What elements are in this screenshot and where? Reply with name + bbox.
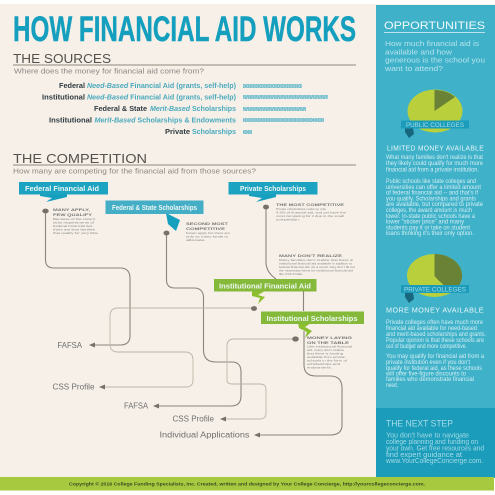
limited money body text: universities can offer a limited amount [386,184,481,191]
note: money laying on the table: that there is funding [307,352,344,356]
banner: public colleges: PUBLIC COLLEGES [406,122,465,129]
pie chart: private colleges [401,254,469,303]
note: the most competitive [276,202,347,222]
note: the most competitive: Private scholarships make up only [276,207,327,211]
footer bar: Copyright © 2016 College Funding Specialists, Inc. Created, written and designed by Your College Concierge, http://yourcollegeconcierge.com. [69,480,425,488]
more money body text: Private colleges often have much more [386,319,483,326]
note: the most competitive: most competing for it due to the small [276,214,345,218]
source row: federal need-based [59,81,302,90]
source row: institutional merit-based: Merit-Based Scholarships & Endowments [94,116,236,124]
node dots [42,205,299,342]
source row: federal and state merit-based: Federal & State [94,104,147,113]
note: money laying on the table: MONEY LAYING [307,335,352,340]
more money body text: families who demonstrate financial [386,376,474,383]
title: HOW FINANCIAL AID WORKS [13,10,356,49]
box: federal and state scholarships [106,200,204,231]
note: many don't realize: the necessary forms for institutional financial aid [279,268,354,272]
note: many don't realize: federal financial aid. As a result, they don't fill out [279,265,355,269]
question text: generous is the school you [385,56,485,65]
more money body text: out of budget and more competitive. [386,343,467,350]
box: federal financial aid: Federal Financial Aid [25,184,99,193]
note: many apply, few qualify: there are less families [53,228,96,232]
label: fafsa (federal): FAFSA [58,341,83,350]
panel: opportunities sidebar [376,5,495,409]
source row: federal and state merit-based [94,104,306,113]
limited money body text: Public schools like state colleges and [386,178,476,185]
panel: the next step [376,408,495,478]
source row: institutional need-based [42,92,328,102]
banner: private colleges: PRIVATE COLLEGES [404,286,467,294]
source row: institutional merit-based [49,116,324,124]
more money body text: You may qualify for financial aid from a [386,353,484,360]
box: institutional financial aid [214,279,316,304]
note: many apply, few qualify: MANY APPLY, [53,207,90,212]
note: many apply, few qualify: Federal Financial Aid, [53,224,93,228]
note: second most competitive: only so many funds to [186,234,229,238]
note: many apply, few qualify: Because of the recent [53,217,95,221]
box: institutional scholarships: Institutional Scholarships [266,314,358,323]
heading: more money available: MORE MONEY AVAILABLE [386,306,484,314]
source row: institutional need-based: Need-Based Financial Aid (grants, self-help) [87,92,237,102]
note: money laying on the table [307,335,353,370]
more money body text: need. [386,382,398,389]
next step body text [385,430,484,465]
label: fafsa (state): FAFSA [124,402,149,410]
note: many don't realize [279,253,355,276]
box: institutional scholarships [261,312,364,338]
more money body text: qualify for federal aid, as these schools [386,365,482,372]
next step body text: college planning and funding on [386,437,478,446]
more money body text [385,319,486,389]
note: second most competitive [186,221,231,242]
note: money laying on the table: scholarships and [307,362,341,366]
note: many apply, few qualify: that qualify for very little. [53,231,99,235]
note: money laying on the table: available from private [307,355,346,359]
box: private scholarships: Private Scholarships [240,184,306,193]
note: money laying on the table: endowments. [307,366,332,370]
note: money laying on the table: schools in the form of [307,358,347,362]
note: money laying on the table: aid, many don't realize [307,348,345,352]
more money body text: private institution even if you don't [386,359,470,366]
limited money body text: loans thinking it's their only option. [386,230,474,237]
source row: federal and state merit-based: Merit-Based Scholarships [150,104,236,113]
note: many don't realize: like CSS Profile. [279,272,303,276]
note: many apply, few qualify [53,207,99,235]
source row: federal need-based: Need-Based Financial Aid (grants, self-help) [87,81,237,90]
sources subtitle: Where does the money for financial aid come from? [14,68,204,76]
box: federal financial aid [19,182,108,202]
note: money laying on the table: ON THE TABLE [307,340,349,345]
flow lines [46,207,342,435]
note: second most competitive: Fewer apply but there are [186,231,231,235]
arrows [89,342,260,438]
next step body text: www.YourCollegeConcierge.com. [385,456,483,465]
limited money body text: you qualify. Scholarships and grants [386,195,476,202]
note: second most competitive: SECOND MOST [186,221,229,226]
next step body text: find expert guidance at [386,450,462,459]
label: css profile (federal): CSS Profile [52,382,95,392]
question text: available and how [385,47,453,56]
pie chart: public colleges [401,90,469,138]
note: many apply, few qualify: strict requirements of [53,220,94,224]
competition subtitle: How many are competing for the financial aid from those sources? [13,168,256,176]
source row: private: Scholarships [192,127,236,136]
limited money body text: financial aid from a private institution. [386,166,479,174]
limited money body text [386,154,483,237]
limited money body text: lower "sticker price" and many [386,219,465,226]
label: individual applications: Individual Applications [160,430,250,440]
note: second most competitive: COMPETITIVE [186,226,225,231]
heading: the sources: THE SOURCES [13,51,111,66]
box: federal and state scholarships: Federal & State Scholarships [112,203,197,212]
question text: How much financial aid is [385,39,479,48]
note: the most competitive: 4.5% of financial aid, and yet have the [276,210,347,214]
panel: the sources [13,51,356,136]
question text: want to attend? [384,64,443,73]
source row: institutional need-based: Institutional [42,92,85,102]
box: institutional financial aid: Institutional Financial Aid [219,282,311,290]
limited money body text: of federal financial aid -- and that's if [386,190,478,197]
more money body text: will offer five-figure discounts to [385,370,466,378]
question text [384,39,485,73]
note: many don't realize: institutional financial aid available in addition to [279,262,353,266]
next step body text: You don't have to navigate [386,430,469,440]
heading: limited money available: LIMITED MONEY AVAILABLE [387,144,484,152]
note: the most competitive: competition. [276,218,300,222]
source row: institutional merit-based: Institutional [49,116,92,124]
footer bar [0,477,494,490]
box: private scholarships [228,182,318,202]
note: money laying on the table: Like institutional financial [307,344,353,348]
note: many don't realize: Many families don't realize that there is [279,258,354,262]
limited money body text: What many families don't realize is that [386,154,483,161]
source row: private: Private [165,127,190,136]
limited money body text: students pay it or take on student [386,224,470,231]
heading: opportunities: OPPORTUNITIES [384,20,485,32]
next step body text: your own. Get free resources and [386,444,484,452]
note: second most competitive: allocate. [186,238,207,242]
limited money body text: are available, but compared to private [386,201,483,208]
label: css profile (institutional): CSS Profile [172,414,215,424]
limited money body text: lower. In-state public schools have a [386,213,475,220]
more money body text: financial aid available for need-based [386,325,477,332]
panel: the competition [13,151,364,440]
note: many don't realize: MANY DON'T REALIZE [279,253,342,258]
note: the most competitive: THE MOST COMPETITIVE [276,202,344,207]
source row: private [165,127,252,136]
note: many apply, few qualify: FEW QUALIFY [53,212,92,217]
source row: federal need-based: Federal [59,81,85,90]
limited money body text: colleges, the award amount is much [386,207,472,214]
heading: the next step: THE NEXT STEP [386,418,453,428]
limited money body text: they likely could qualify for much more [386,160,483,167]
heading: the competition: THE COMPETITION [13,151,147,166]
